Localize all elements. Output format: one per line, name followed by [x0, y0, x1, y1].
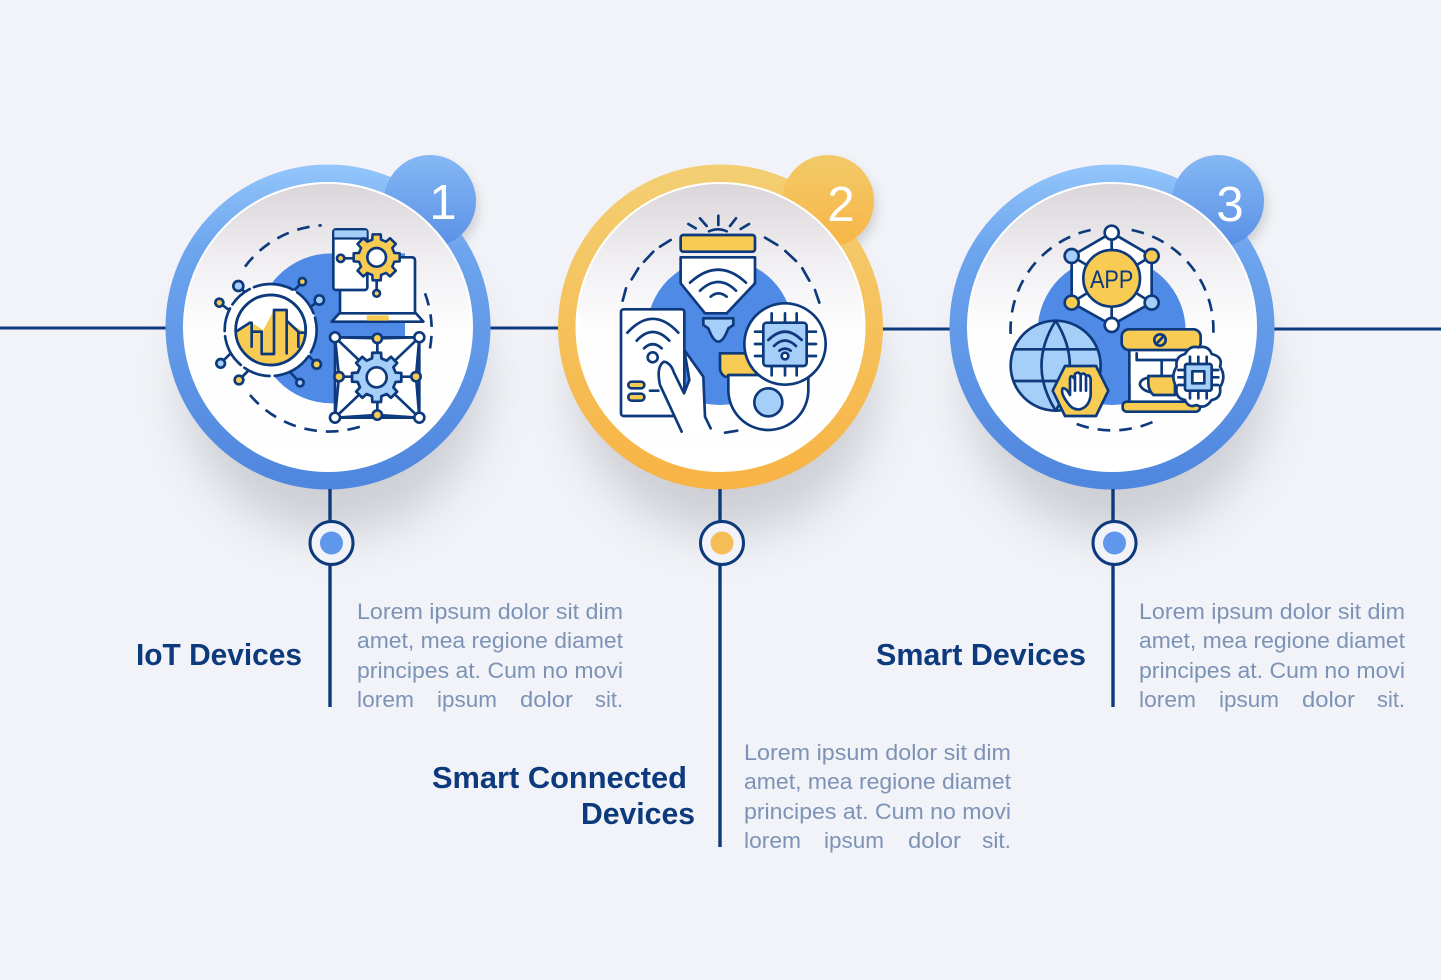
text block: step 2	[744, 740, 1011, 853]
infographic	[0, 155, 1441, 852]
drop shadows	[184, 235, 1268, 535]
text block: step 1: sit.	[595, 687, 623, 712]
text block: step 2: principes at. Cum no movi	[744, 799, 1011, 824]
text block: step 1: dolor	[520, 687, 573, 712]
icon: iot devices	[215, 225, 432, 432]
icon: connected lamp and sensors	[621, 216, 826, 433]
panel: step 3 circle	[950, 155, 1274, 490]
text block: step 1: Lorem ipsum dolor sit dim	[357, 599, 623, 624]
text block: step 2: lorem	[744, 828, 801, 853]
connector: step 1	[310, 489, 353, 707]
text block: step 3: amet, mea regione diamet	[1139, 628, 1405, 653]
badge 2: 2	[827, 178, 855, 232]
text block: step 2: Lorem ipsum dolor sit dim	[744, 740, 1011, 765]
text block: step 1: principes at. Cum no movi	[357, 658, 623, 683]
horizontal timeline	[0, 328, 1441, 329]
text block: step 3: sit.	[1377, 687, 1405, 712]
badge 1	[384, 155, 476, 247]
text block: step 2: ipsum	[824, 828, 884, 853]
text block: step 3: dolor	[1302, 687, 1355, 712]
label: APP: APP	[1090, 267, 1133, 294]
panel: step 1 circle	[166, 155, 490, 490]
text block: step 2: dolor	[908, 828, 961, 853]
badge 1: 1	[429, 176, 457, 230]
badge 3: 3	[1216, 178, 1244, 232]
badge 3	[1172, 155, 1264, 247]
heading: Smart Devices: Smart Devices	[876, 637, 1086, 672]
text block: step 3: Lorem ipsum dolor sit dim	[1139, 599, 1405, 624]
text block: step 3	[1139, 599, 1405, 712]
text block: step 3: ipsum	[1219, 687, 1279, 712]
connector: step 3	[1093, 489, 1136, 707]
heading: Smart Connected Devices	[432, 760, 695, 831]
heading: Smart Connected Devices: Devices	[581, 796, 695, 831]
heading: Smart Connected Devices: Smart Connected	[432, 760, 687, 795]
text block: step 3: principes at. Cum no movi	[1139, 658, 1405, 683]
text block: step 1: amet, mea regione diamet	[357, 628, 623, 653]
heading: IoT Devices: IoT Devices	[136, 637, 302, 672]
text block: step 2: sit.	[982, 828, 1011, 853]
badge 2	[782, 155, 874, 247]
panel: step 2 circle	[558, 155, 883, 490]
icon: app, globe, smart coffee machine	[1011, 226, 1223, 430]
text block: step 1	[357, 599, 623, 712]
connector: step 2	[700, 489, 744, 847]
text block: step 2: amet, mea regione diamet	[744, 769, 1011, 794]
text block: step 1: ipsum	[437, 687, 497, 712]
text block: step 3: lorem	[1139, 687, 1196, 712]
text block: step 1: lorem	[357, 687, 414, 712]
